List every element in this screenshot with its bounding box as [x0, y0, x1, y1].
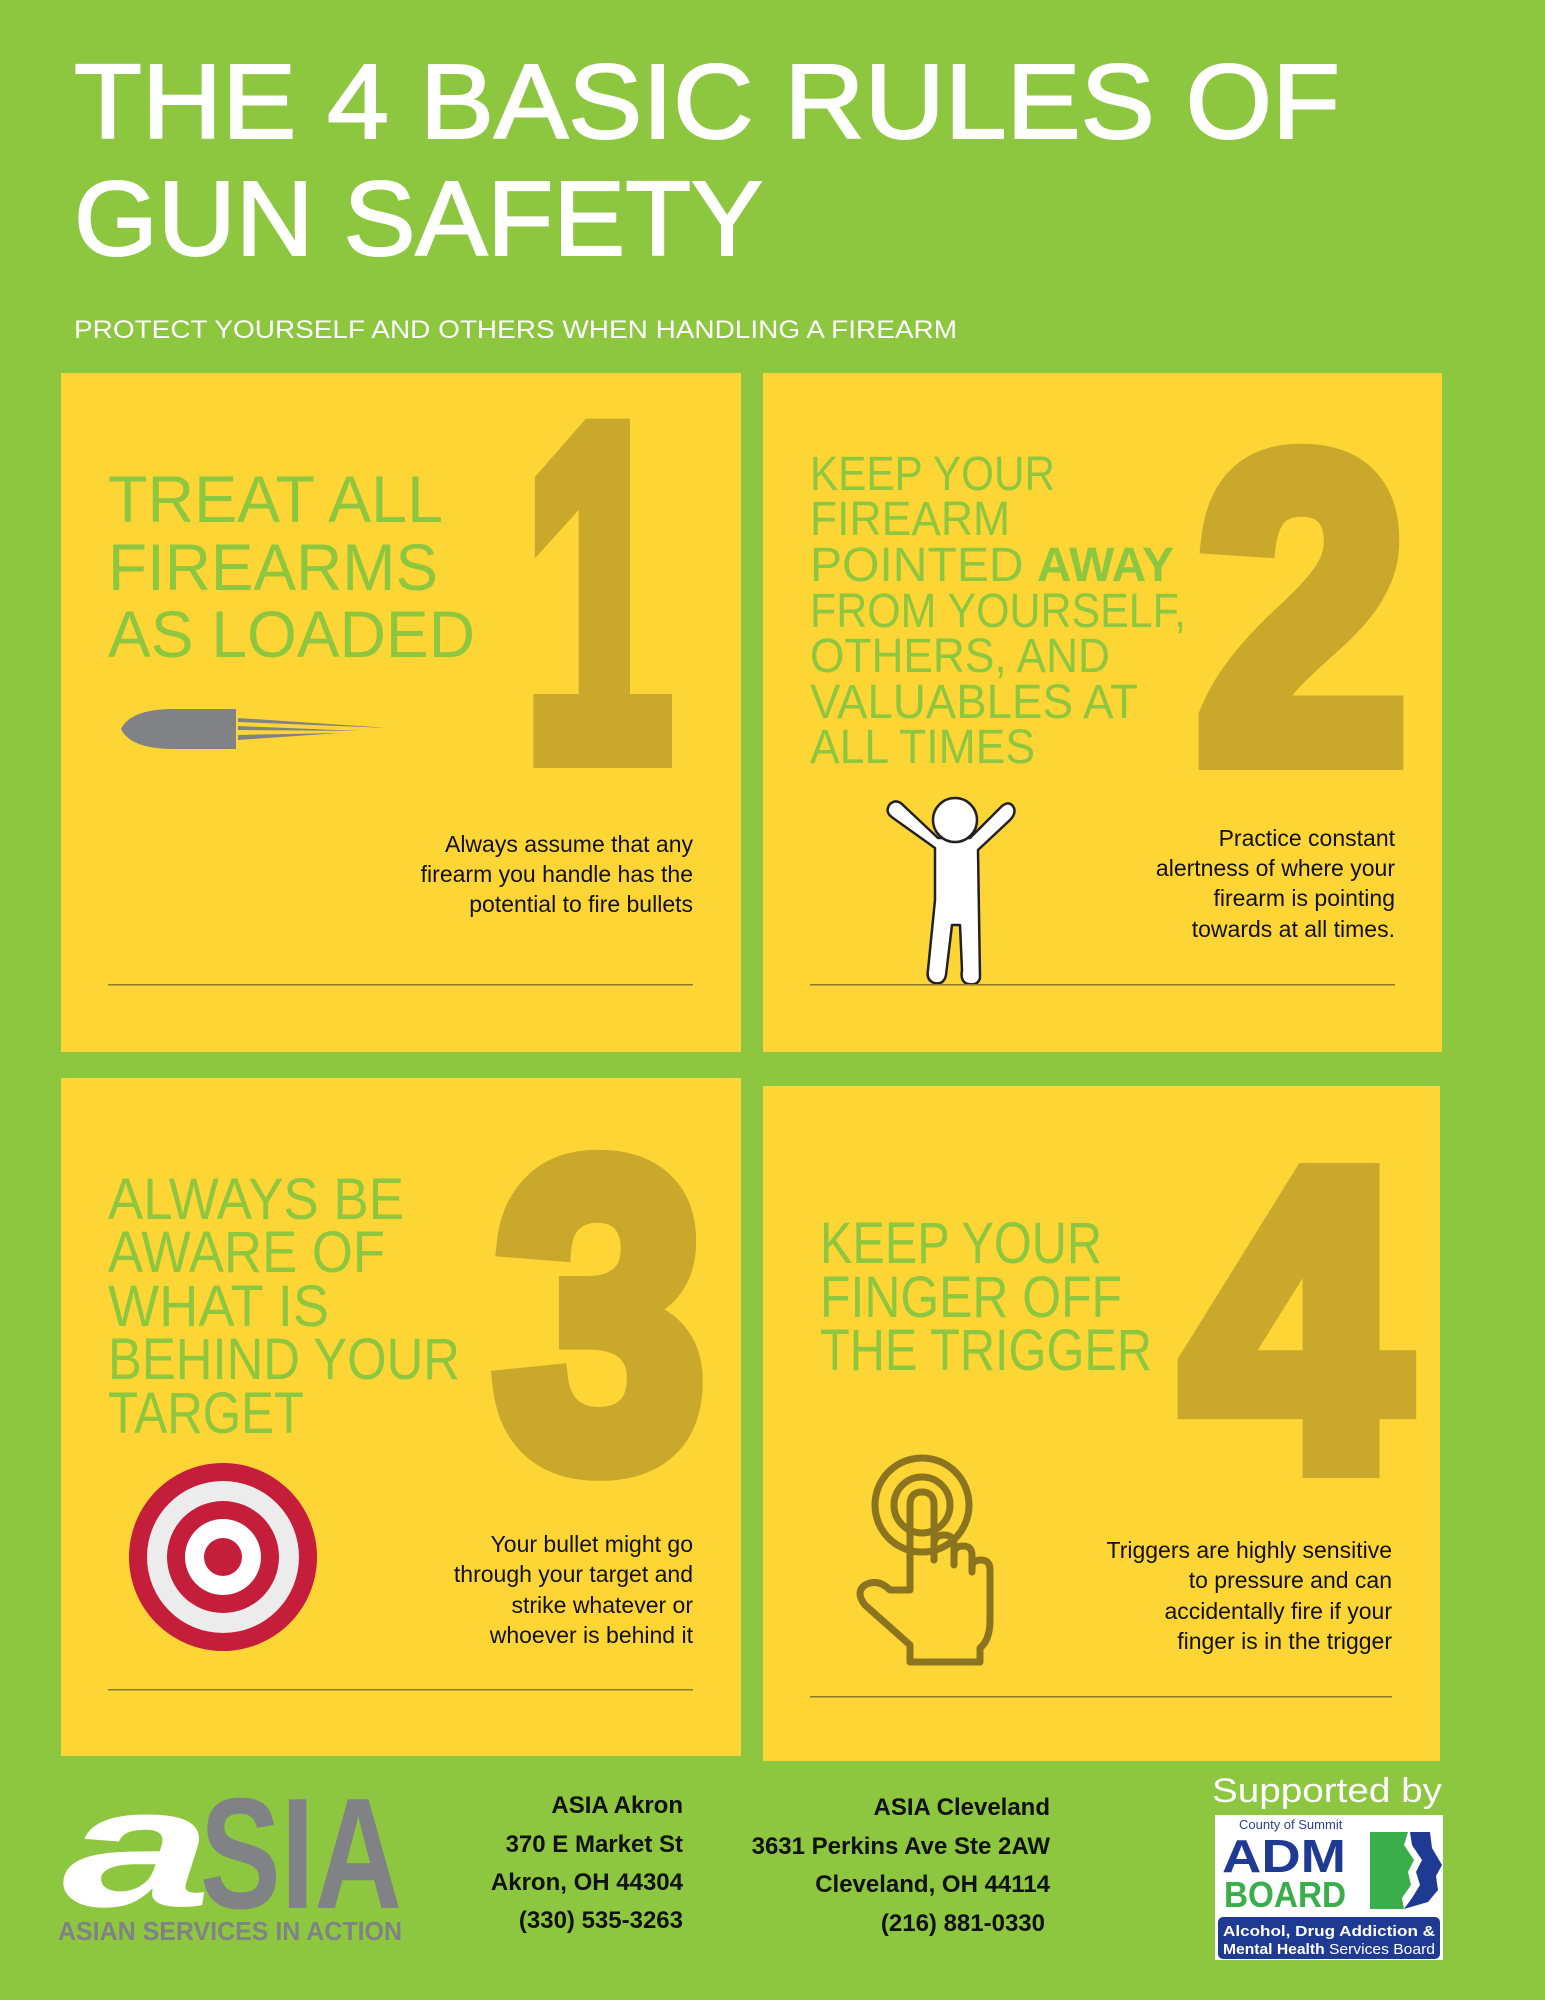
heading 2: KEEP YOUR	[810, 448, 1055, 501]
number 4: 4	[1184, 1086, 1409, 1555]
address: Akron: 370 E Market St	[506, 1831, 683, 1858]
logo: ASIA: ASIAN SERVICES IN ACTION	[58, 1916, 402, 1946]
subtitle: PROTECT YOURSELF AND OTHERS WHEN HANDLING A FIREARM	[74, 316, 957, 344]
body text 3: whoever is behind it	[489, 1622, 694, 1648]
body text 1: potential to fire bullets	[469, 891, 693, 917]
logo: ADM board: Mental Health Services Board	[1223, 1941, 1435, 1958]
heading 2: OTHERS, AND	[810, 630, 1110, 683]
number 1: 1	[524, 330, 672, 855]
logo: ADM board: County of Summit	[1239, 1817, 1343, 1832]
heading 1: AS LOADED	[108, 597, 475, 671]
logo: ADM board: BOARD	[1224, 1874, 1346, 1915]
address: Cleveland: (216) 881-0330	[881, 1910, 1045, 1937]
heading 4: FINGER OFF	[820, 1265, 1122, 1330]
icon: target	[129, 1463, 317, 1651]
heading 1: FIREARMS	[108, 530, 438, 604]
address: Cleveland: 3631 Perkins Ave Ste 2AW	[752, 1833, 1050, 1860]
address: Akron	[491, 1792, 684, 1934]
heading 3	[108, 1167, 460, 1446]
title: GUN SAFETY	[74, 160, 763, 278]
address: Cleveland: ASIA Cleveland	[874, 1794, 1050, 1821]
panel: rule 4	[763, 1086, 1440, 1761]
address: Akron: Akron, OH 44304	[491, 1869, 684, 1896]
logo: ASIA: a	[62, 1753, 212, 1943]
heading 3: AWARE OF	[108, 1220, 385, 1285]
body text 3: through your target and	[454, 1561, 693, 1587]
heading 2: FIREARM	[810, 493, 1010, 546]
heading 2: FROM YOURSELF,	[810, 585, 1186, 638]
panel: rule 3	[61, 1075, 741, 1756]
heading 3: ALWAYS BE	[108, 1167, 404, 1232]
body text 1: firearm you handle has the	[421, 861, 693, 887]
heading 3: BEHIND YOUR	[108, 1327, 460, 1392]
body text 2: alertness of where your	[1156, 855, 1395, 881]
heading 4: THE TRIGGER	[820, 1318, 1152, 1383]
panel: rule 1	[61, 330, 741, 1052]
panel: rule 2	[763, 369, 1442, 1052]
body text 2	[1156, 825, 1396, 942]
title	[74, 43, 1340, 278]
body text 2: firearm is pointing	[1213, 885, 1395, 911]
logo: ASIA: SIA	[200, 1766, 402, 1942]
logo: ADM board: Alcohol, Drug Addiction &	[1223, 1923, 1435, 1940]
body text 3: strike whatever or	[511, 1592, 693, 1618]
number 2: 2	[1197, 369, 1407, 849]
body text 1: Always assume that any	[445, 831, 693, 857]
icon: hand pressing	[860, 1458, 990, 1662]
icon: person	[888, 798, 1014, 984]
icon: bullet	[121, 709, 389, 749]
heading 3: WHAT IS	[108, 1274, 329, 1339]
heading 1: TREAT ALL	[108, 462, 443, 536]
heading 2: ALL TIMES	[810, 721, 1035, 774]
heading 3: TARGET	[108, 1381, 304, 1446]
body text 4: Triggers are highly sensitive	[1106, 1537, 1392, 1563]
number 3: 3	[495, 1075, 705, 1555]
body text 3: Your bullet might go	[491, 1531, 693, 1557]
address: Cleveland	[752, 1794, 1051, 1937]
heading 2	[810, 448, 1186, 774]
supported by: Supported by	[1212, 1772, 1442, 1810]
logo: ADM board	[1215, 1815, 1443, 1960]
logo: ADM board: ADM	[1222, 1830, 1346, 1882]
body text 4: to pressure and can	[1189, 1567, 1392, 1593]
body text 4: accidentally fire if your	[1164, 1598, 1392, 1624]
body text 2: towards at all times.	[1192, 916, 1395, 942]
heading 4	[820, 1211, 1152, 1383]
heading 2: POINTED AWAY	[810, 539, 1174, 592]
address: Cleveland: Cleveland, OH 44114	[815, 1871, 1051, 1898]
heading 1	[108, 462, 475, 671]
title: THE 4 BASIC RULES OF	[74, 43, 1340, 161]
logo: ASIA	[58, 1753, 402, 1946]
body text 2: Practice constant	[1219, 825, 1396, 851]
body text 3	[454, 1531, 694, 1648]
heading 4: KEEP YOUR	[820, 1211, 1102, 1276]
address: Akron: ASIA Akron	[551, 1792, 683, 1819]
body text 4: finger is in the trigger	[1177, 1628, 1392, 1654]
heading 2: VALUABLES AT	[810, 676, 1138, 729]
body text 4	[1106, 1537, 1392, 1654]
address: Akron: (330) 535-3263	[519, 1907, 683, 1934]
body text 1	[421, 831, 693, 917]
